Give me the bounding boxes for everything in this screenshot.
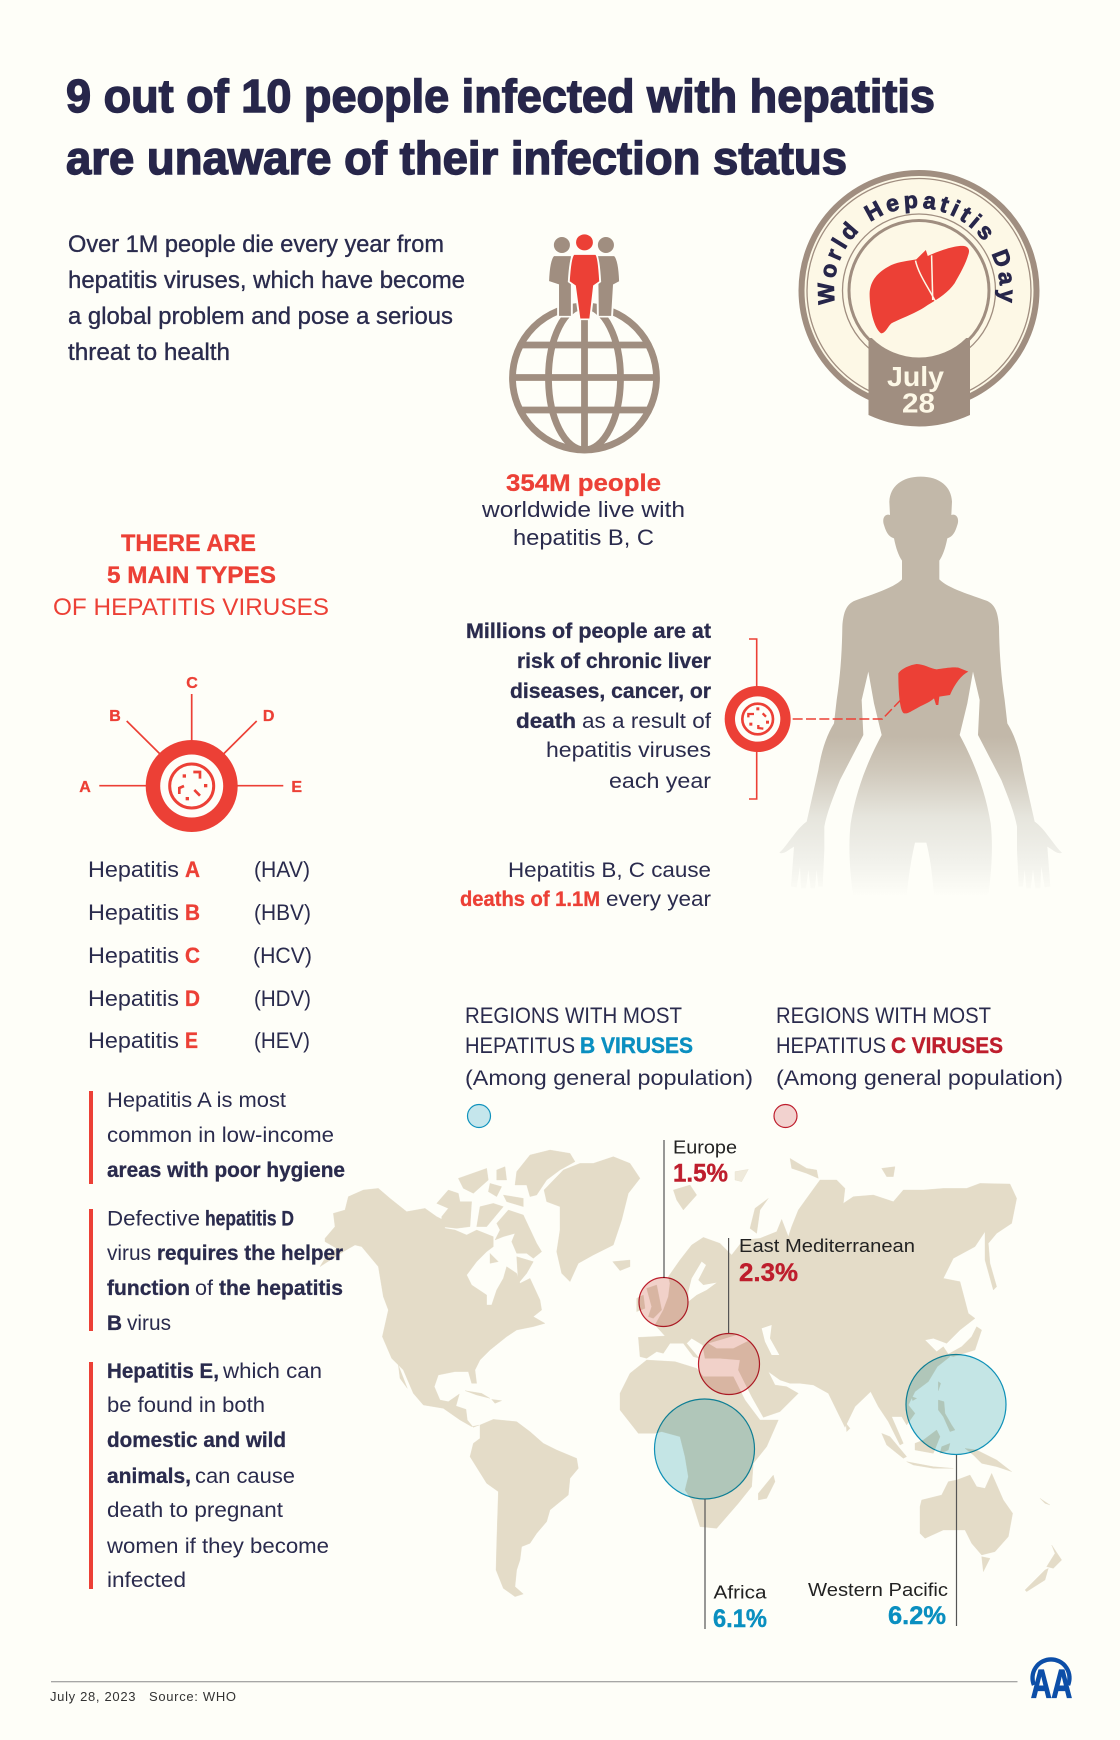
- note: Hepatitis D: of: [195, 1277, 213, 1300]
- note: Hepatitis E: be found in both: [107, 1394, 265, 1417]
- callout: Africa: 6.1%: [713, 1605, 767, 1633]
- icon: virus types diagram: A: [79, 779, 91, 796]
- callout: East Mediterranean: 2.3%: [739, 1259, 798, 1287]
- note: Hepatitis E: which can: [222, 1360, 322, 1383]
- footer source: July 28, 2023 Source: WHO: [50, 1689, 236, 1704]
- list: hepatitis types: B: [185, 900, 200, 925]
- note: Hepatitis E: can cause: [195, 1465, 295, 1488]
- legend: C viruses: (Among general population): [776, 1067, 1063, 1090]
- legend: B viruses: (Among general population): [465, 1067, 753, 1090]
- list: hepatitis types: (HDV): [254, 986, 311, 1011]
- note: Hepatitis E: domestic and wild: [107, 1429, 286, 1452]
- legend: B viruses: REGIONS WITH MOST: [465, 1003, 682, 1028]
- note: Hepatitis D: requires the helper: [157, 1242, 343, 1265]
- note: Hepatitis A: areas with poor hygiene: [107, 1159, 345, 1182]
- stat: 354M people: [481, 470, 685, 550]
- callout: Western Pacific: Western Pacific: [808, 1580, 948, 1600]
- note: Hepatitis D: the hepatitis: [219, 1277, 343, 1300]
- note: Hepatitis D: Defective: [107, 1208, 200, 1230]
- legend: B viruses: B VIRUSES: [580, 1033, 693, 1058]
- heading: 5 main types: 5 MAIN TYPES: [107, 562, 276, 589]
- list: hepatitis types: (HEV): [254, 1028, 310, 1053]
- text: deaths per year: [460, 859, 711, 911]
- callout: Africa: [654, 1399, 768, 1633]
- text: deaths per year: every year: [606, 888, 711, 911]
- text: deaths per year: Hepatitis B, C cause: [508, 859, 711, 882]
- text: millions at risk: hepatitis viruses: [546, 739, 711, 762]
- list: hepatitis types: Hepatitis: [88, 943, 179, 968]
- world map: [320, 1150, 1062, 1597]
- list: hepatitis types: Hepatitis: [88, 986, 179, 1011]
- list: hepatitis types: C: [185, 943, 200, 968]
- legend: C viruses: C VIRUSES: [891, 1033, 1003, 1058]
- list: hepatitis types: (HBV): [254, 900, 311, 925]
- text: millions at risk: risk of chronic liver: [517, 650, 711, 673]
- legend: C viruses: REGIONS WITH MOST: [776, 1003, 991, 1028]
- heading: 5 main types: OF HEPATITIS VIRUSES: [53, 594, 329, 621]
- list: hepatitis types: (HAV): [254, 857, 310, 882]
- list: hepatitis types: [88, 857, 312, 1053]
- text: deaths per year: deaths of 1.1M: [460, 888, 600, 911]
- legend: C viruses: HEPATITUS: [776, 1033, 886, 1058]
- note: Hepatitis D: hepatitis D: [205, 1208, 294, 1230]
- note: Hepatitis D: [89, 1208, 343, 1335]
- map cutouts: Baltic, Black and Caspian seas: [688, 1262, 779, 1355]
- stat: 354M people: 354M people: [506, 470, 661, 497]
- logo: AA: [1031, 1659, 1072, 1706]
- note: Hepatitis E: [89, 1360, 329, 1592]
- title: are unaware of their infection status: [66, 132, 847, 184]
- callout: East Mediterranean: [698, 1236, 915, 1394]
- list: hepatitis types: E: [185, 1028, 198, 1053]
- text: millions at risk: diseases, cancer, or: [510, 680, 711, 703]
- intro text: hepatitis viruses, which have become: [68, 267, 465, 294]
- list: hepatitis types: Hepatitis: [88, 1028, 179, 1053]
- legend: B viruses: HEPATITUS: [465, 1033, 575, 1058]
- callout: Western Pacific: 6.2%: [888, 1602, 946, 1630]
- note: Hepatitis E: infected: [107, 1569, 186, 1592]
- list: hepatitis types: D: [185, 986, 200, 1011]
- badge: World Hepatitis Day: [798, 170, 1040, 426]
- icon: virus types diagram: B: [109, 708, 121, 725]
- note: Hepatitis E: animals,: [107, 1465, 191, 1488]
- callout: Africa: Africa: [714, 1582, 768, 1602]
- text: millions at risk: death: [516, 710, 576, 733]
- note: Hepatitis A: common in low-income: [107, 1124, 334, 1147]
- intro text: Over 1M people die every year from: [68, 231, 444, 258]
- note: Hepatitis A: Hepatitis A is most: [107, 1089, 286, 1112]
- stat: 354M people: worldwide live with: [481, 497, 685, 522]
- note: Hepatitis A: [89, 1089, 345, 1184]
- text: millions at risk: as a result of: [582, 710, 711, 733]
- callout: East Mediterranean: East Mediterranean: [739, 1236, 915, 1256]
- intro text: [68, 231, 465, 366]
- note: Hepatitis D: function: [107, 1277, 190, 1300]
- heading: 5 main types: [53, 530, 329, 621]
- icon: virus types diagram: D: [263, 708, 274, 725]
- callout: Europe: Europe: [673, 1138, 737, 1158]
- legend: C viruses: [774, 1003, 1063, 1128]
- text: millions at risk: [466, 620, 711, 793]
- title: [66, 70, 935, 184]
- list: hepatitis types: (HCV): [253, 943, 312, 968]
- icon: virus types diagram: C: [186, 675, 198, 692]
- note: Hepatitis D: virus: [107, 1242, 151, 1265]
- badge: World Hepatitis Day: 28: [902, 388, 935, 418]
- heading: 5 main types: THERE ARE: [121, 530, 256, 557]
- note: Hepatitis D: B: [107, 1312, 122, 1335]
- icon: globe with people: [512, 234, 657, 450]
- logo: AA: AA: [1031, 1662, 1072, 1706]
- note: Hepatitis E: Hepatitis E,: [107, 1360, 219, 1383]
- list: hepatitis types: Hepatitis: [88, 900, 179, 925]
- intro text: a global problem and pose a serious: [68, 303, 453, 330]
- stat: 354M people: hepatitis B, C: [513, 525, 654, 550]
- icon: virus types diagram: E: [291, 779, 302, 796]
- note: Hepatitis D: virus: [127, 1312, 171, 1335]
- note: Hepatitis E: death to pregnant: [107, 1499, 283, 1522]
- title: 9 out of 10 people infected with hepatitis: [66, 70, 935, 122]
- badge: World Hepatitis Day: July: [887, 361, 944, 392]
- liver in body: [898, 664, 968, 713]
- note: Hepatitis E: women if they become: [106, 1535, 329, 1558]
- icon: virus callout with bracket: [725, 639, 791, 799]
- callout: Europe: 1.5%: [673, 1160, 728, 1188]
- legend: B viruses: [465, 1003, 753, 1128]
- list: hepatitis types: Hepatitis: [88, 857, 179, 882]
- human body silhouette: [779, 477, 1062, 897]
- callout: Western Pacific: [808, 1354, 1006, 1630]
- icon: virus types diagram: [79, 675, 302, 832]
- text: millions at risk: Millions of people are at: [466, 620, 711, 643]
- text: millions at risk: each year: [609, 770, 711, 793]
- list: hepatitis types: A: [185, 857, 200, 882]
- intro text: threat to health: [68, 339, 230, 366]
- callout: Europe: [639, 1138, 737, 1326]
- badge: World Hepatitis Day: World Hepatitis Day: [817, 195, 1013, 306]
